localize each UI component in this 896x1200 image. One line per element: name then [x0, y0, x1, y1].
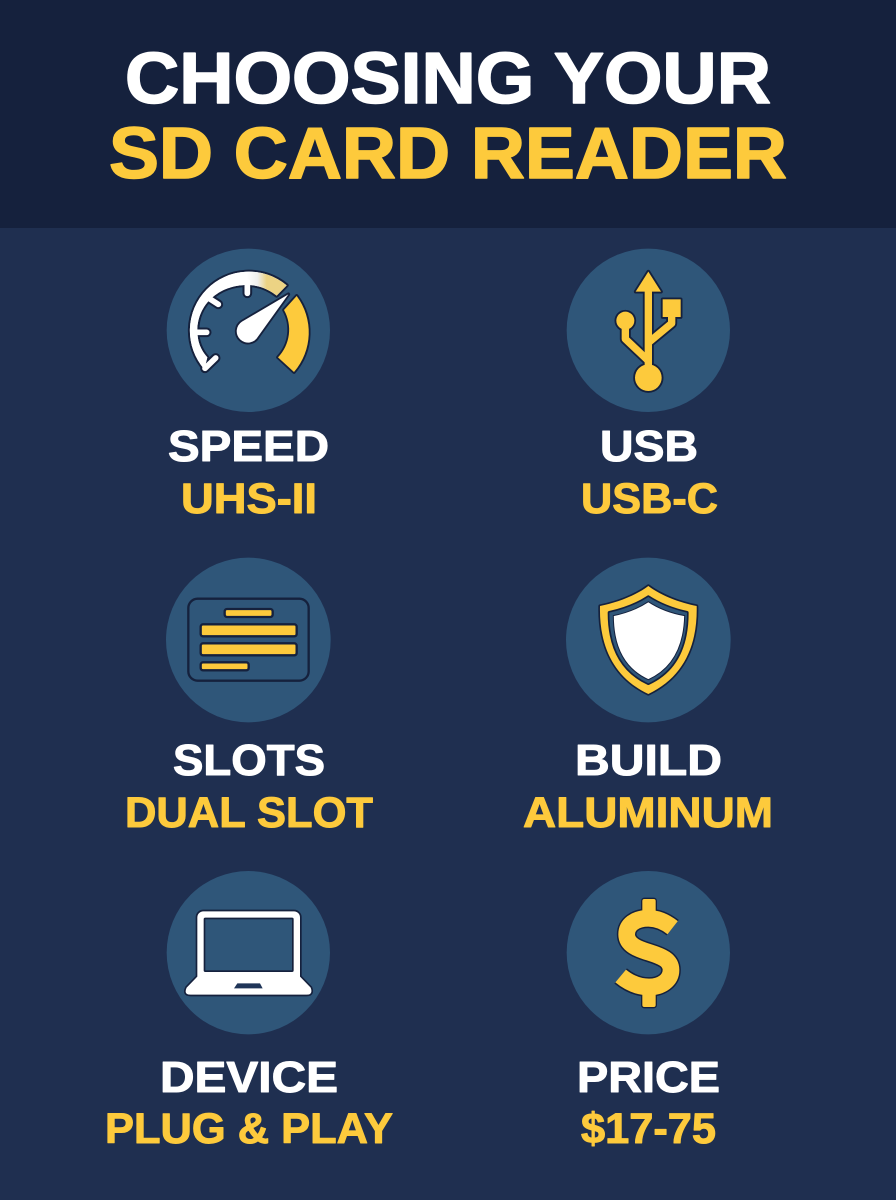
header band with title [0, 0, 896, 228]
panel: device [105, 871, 393, 1153]
value: price range: $17-75 [581, 1105, 716, 1153]
label: build: BUILD [575, 736, 722, 785]
icon: dual slot card [166, 558, 331, 722]
icon: usb symbol [567, 249, 730, 412]
icon: dollar sign [567, 871, 730, 1034]
icon: speedometer gauge [167, 249, 330, 412]
icon: laptop [167, 871, 330, 1034]
value: aluminum: ALUMINUM [523, 789, 773, 837]
icon: shield [566, 558, 731, 722]
panel: price [567, 871, 730, 1153]
label: usb: USB [600, 422, 698, 471]
title line 2: SD CARD READER [109, 114, 787, 194]
label: slots: SLOTS [173, 736, 325, 785]
label: speed: SPEED [168, 422, 329, 471]
panel: build [523, 558, 773, 837]
label: device: DEVICE [160, 1053, 338, 1102]
value: plug and play: PLUG & PLAY [105, 1105, 393, 1153]
label: price: PRICE [577, 1053, 720, 1102]
value: UHS-II: UHS-II [181, 475, 317, 523]
panel: usb [567, 249, 730, 523]
value: dual slot: DUAL SLOT [125, 789, 373, 837]
value: USB-C: USB-C [581, 475, 718, 523]
panel: slots [125, 558, 373, 837]
panel: speed [167, 249, 330, 523]
title line 1: CHOOSING YOUR [125, 39, 771, 119]
